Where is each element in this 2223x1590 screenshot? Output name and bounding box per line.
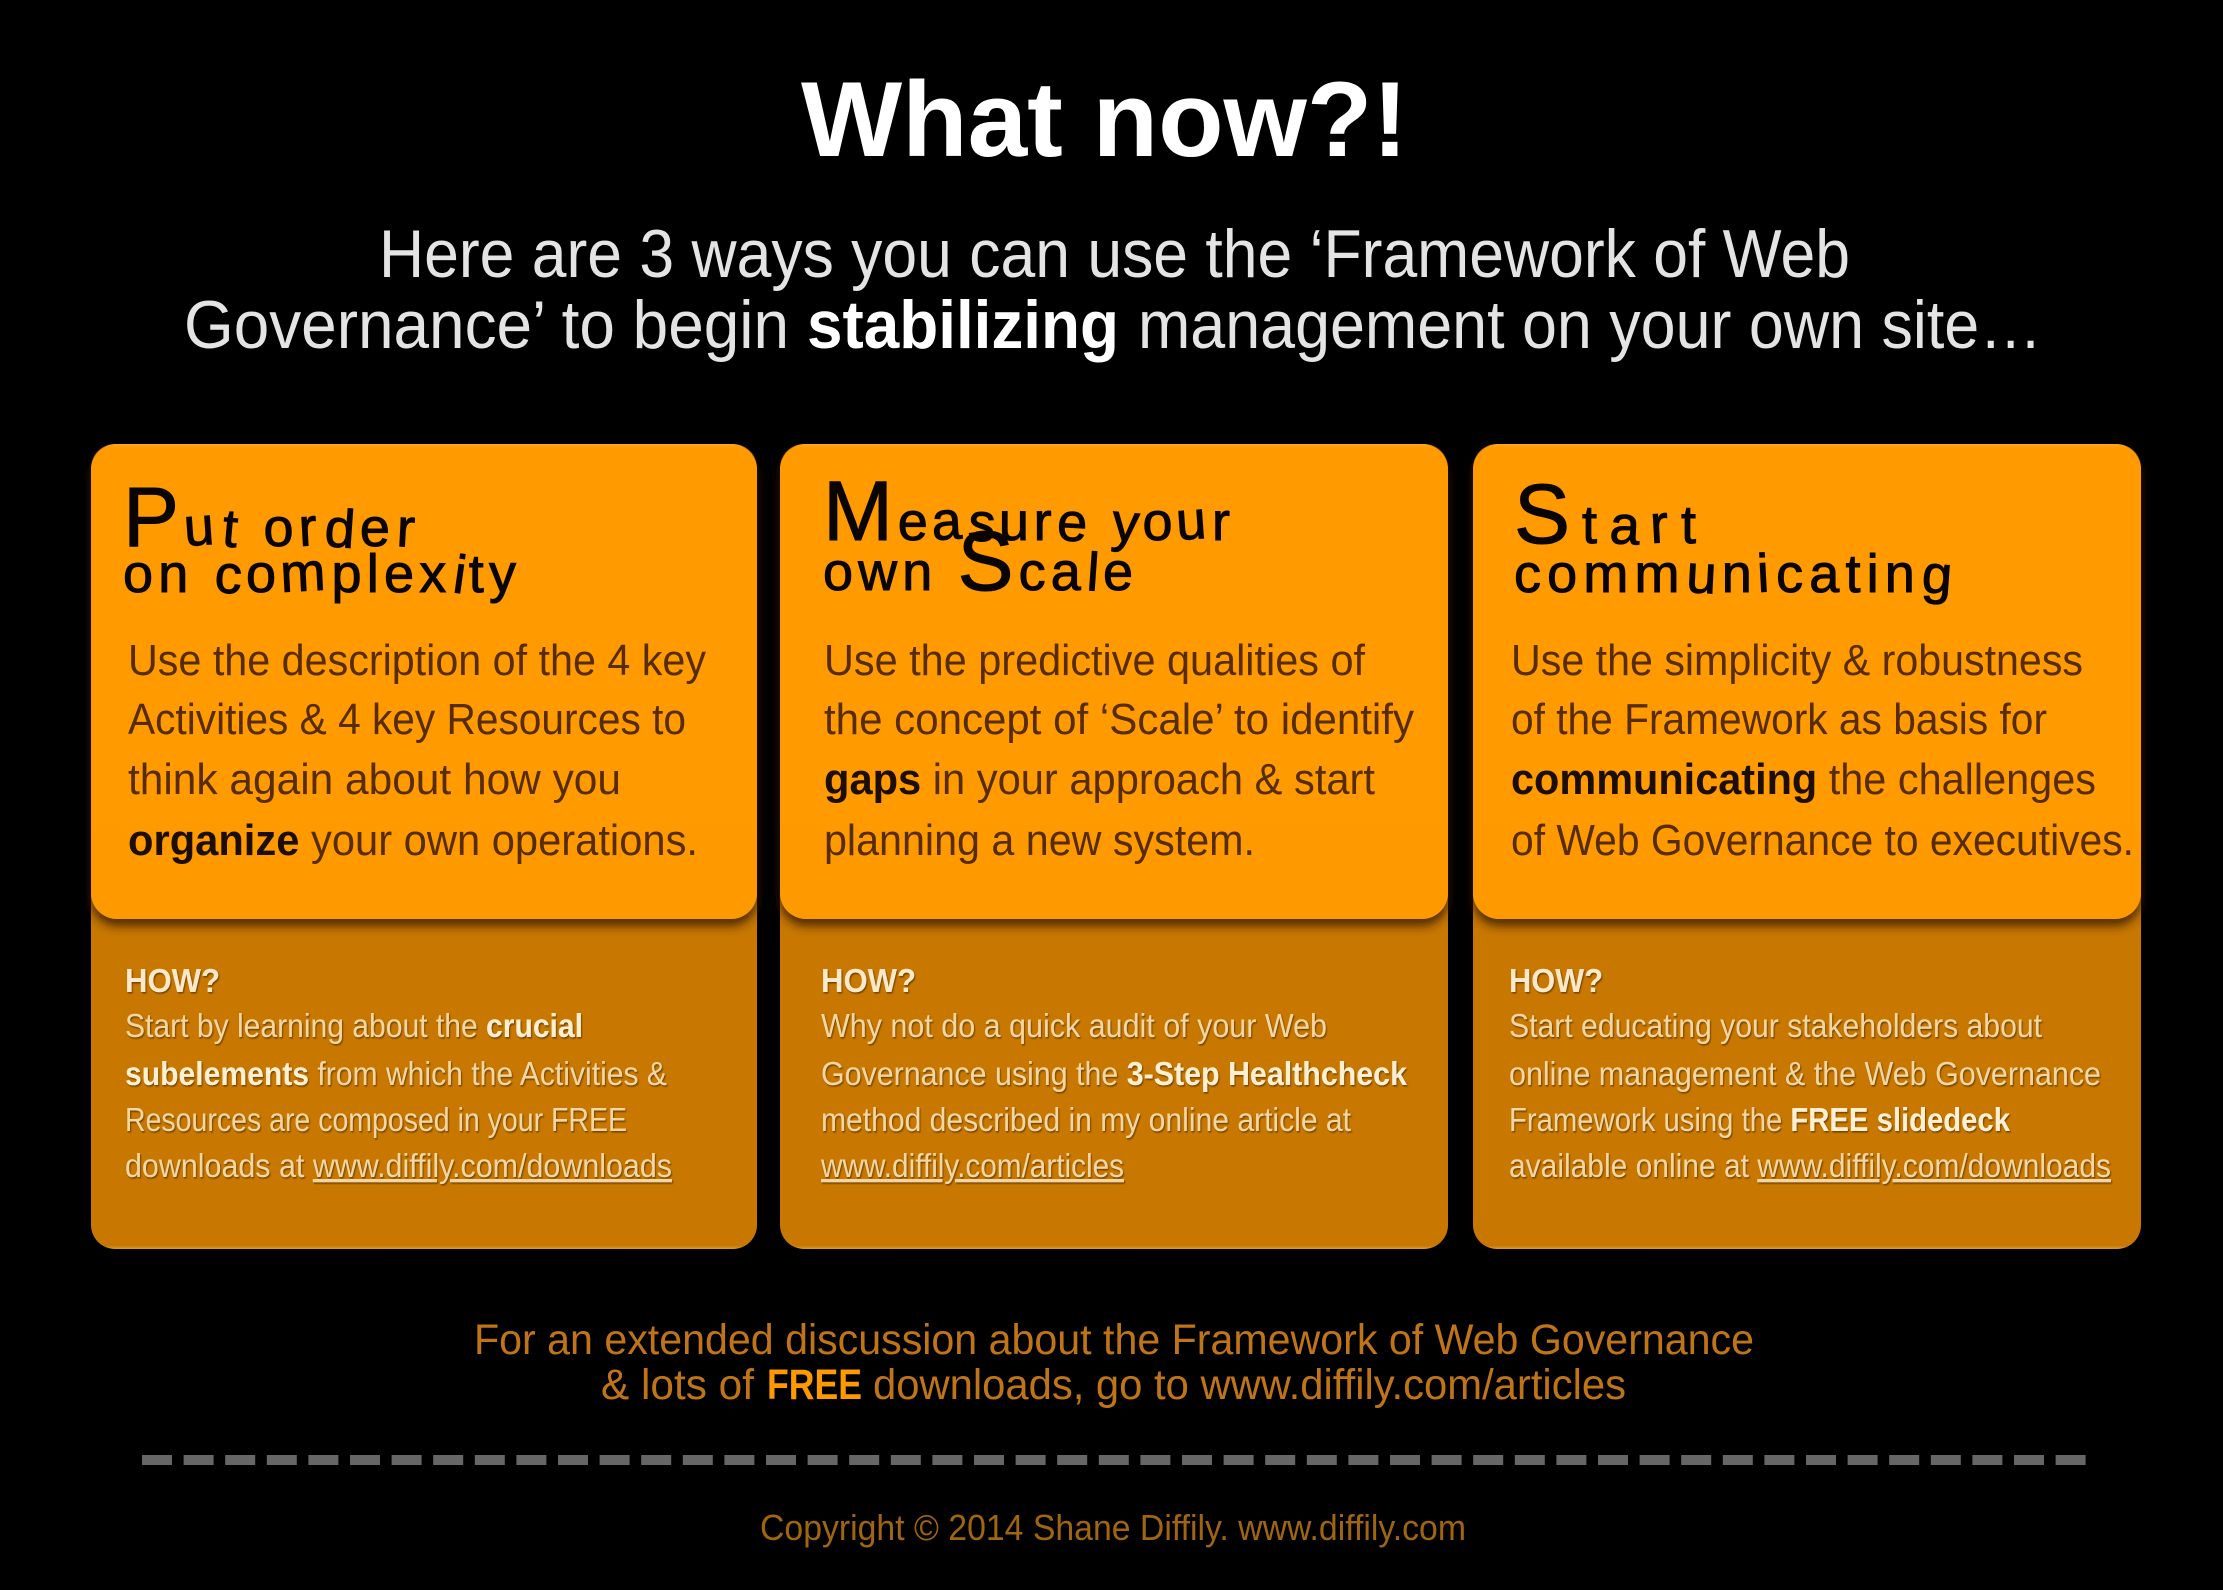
panel 2 handwritten heading	[823, 464, 1230, 608]
panel 3 description	[1511, 636, 2134, 865]
panel: start communicating	[1473, 444, 2141, 1249]
panel 3 handwritten heading	[1514, 467, 1954, 606]
panel 1 description: Activities & 4 key Resources to	[128, 695, 686, 744]
panel 2 description: gaps in your approach & start	[824, 755, 1375, 804]
subtitle: Governance’ to begin	[184, 287, 789, 363]
panel 1 how text: Resources are composed in your FREE	[125, 1101, 627, 1138]
call to action text: For an extended discussion about the Framework of Web Governance	[474, 1316, 1754, 1364]
panel 2 how text	[820, 962, 1408, 1184]
panel 1 how text	[125, 962, 672, 1184]
panel 2 how text: Governance using the 3-Step Healthcheck	[821, 1055, 1408, 1092]
call to action text: downloads, go to www.diffily.com/articles	[873, 1361, 1626, 1409]
panel 3 how text: Start educating your stakeholders about	[1509, 1007, 2042, 1044]
panel 2 description: the concept of ‘Scale’ to identify	[824, 695, 1414, 744]
panel 1 description: Use the description of the 4 key	[128, 636, 706, 685]
panel 1 how background	[91, 444, 757, 1249]
panel 2 description: planning a new system.	[824, 816, 1255, 865]
panel 2 description	[824, 636, 1414, 865]
panel 1 handwritten heading: Put order	[123, 470, 417, 564]
panel 1 how text: Start by learning about the crucial	[125, 1007, 583, 1044]
title: What now?!	[801, 59, 1408, 179]
panel 2 description: Use the predictive qualities of	[824, 636, 1366, 685]
call to action text: FREE	[767, 1361, 862, 1409]
panel 1 main background	[91, 444, 757, 919]
panel 2 main background	[780, 444, 1448, 919]
subtitle: stabilizing	[807, 287, 1119, 363]
subtitle	[184, 216, 2042, 363]
panel 2 handwritten heading: Measure your	[823, 464, 1230, 558]
copyright: Copyright © 2014 Shane Diffily. www.diffily.com	[760, 1507, 1466, 1548]
panel 3 how text: HOW?	[1509, 962, 1603, 999]
panel 2 how text: method described in my online article at	[821, 1101, 1351, 1138]
panel 2 handwritten heading: own Scale	[823, 514, 1133, 608]
panel 3 description: Use the simplicity & robustness	[1511, 636, 2083, 685]
panel 2 how text: HOW?	[821, 962, 916, 999]
panel: measure your own scale	[780, 444, 1448, 1249]
panel 1 how text: downloads at www.diffily.com/downloads	[125, 1147, 672, 1184]
subtitle: Here are 3 ways you can use the ‘Framework of Web	[379, 216, 1850, 292]
panel 3 description: of Web Governance to executives.	[1511, 816, 2134, 865]
panel 1 handwritten heading: on complexity	[123, 542, 516, 606]
panel 3 how text: Framework using the FREE slidedeck	[1509, 1101, 2011, 1138]
panel 2 how text: www.diffily.com/articles	[820, 1147, 1124, 1184]
panel 1 handwritten heading	[123, 470, 516, 606]
panel 1 description: organize your own operations.	[128, 816, 698, 865]
panel 3 how text: online management & the Web Governance	[1509, 1055, 2101, 1092]
panel 1 how text: HOW?	[125, 962, 220, 999]
panel 2 how background	[780, 444, 1448, 1249]
panel 1 description: think again about how you	[128, 755, 621, 804]
panel: put order on complexity	[91, 444, 757, 1249]
panel 1 description	[128, 636, 706, 865]
panel 3 main background	[1473, 444, 2141, 919]
panel 2 how text: Why not do a quick audit of your Web	[821, 1007, 1327, 1044]
subtitle: management on your own site…	[1138, 287, 2042, 363]
panel 1 how text: subelements from which the Activities &	[125, 1055, 667, 1092]
panel 3 how background	[1473, 444, 2141, 1249]
panel 3 description: of the Framework as basis for	[1511, 695, 2047, 744]
call to action text	[474, 1316, 1754, 1409]
call to action text: & lots of	[601, 1361, 755, 1409]
panel 3 handwritten heading: communicating	[1514, 543, 1954, 606]
panel 3 handwritten heading: Start	[1514, 467, 1696, 561]
panel 3 description: communicating the challenges	[1511, 755, 2096, 804]
panel 3 how text	[1509, 962, 2111, 1184]
panel 3 how text: available online at www.diffily.com/downloads	[1509, 1147, 2111, 1184]
